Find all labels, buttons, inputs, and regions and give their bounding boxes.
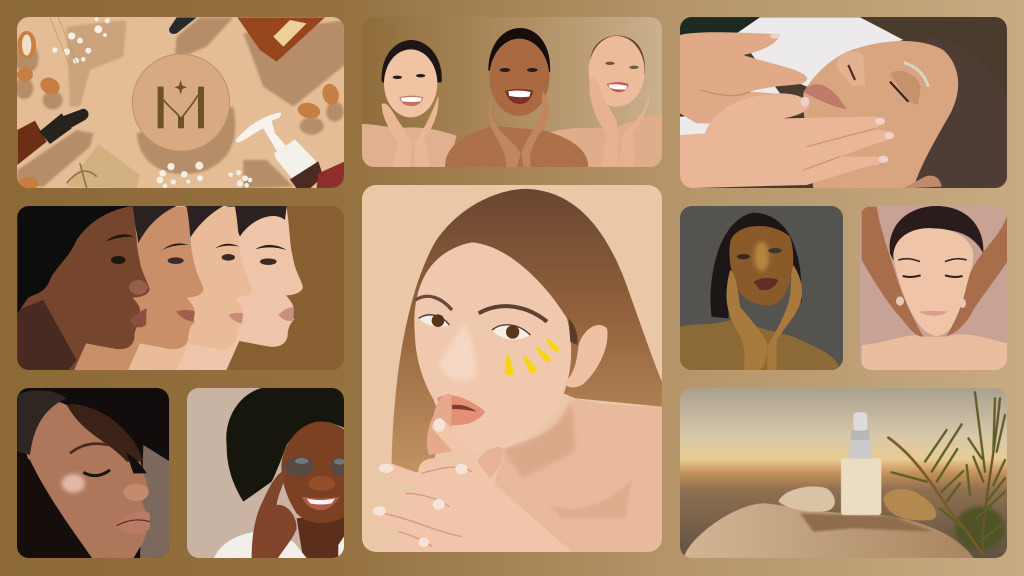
- woman center: [445, 28, 588, 167]
- product shadows: [15, 17, 347, 188]
- panel: woman with gold sheen on skin: [680, 206, 843, 370]
- therapist upper hand: [680, 32, 808, 123]
- hair: [391, 189, 662, 478]
- bottle: [841, 412, 881, 515]
- panel: facial massage: [680, 17, 1008, 188]
- argan nuts: [17, 31, 341, 190]
- panel: side-lit face closeup: [17, 388, 170, 560]
- amber jar: [237, 17, 325, 62]
- profile 4: lightest: [176, 206, 303, 370]
- afro: [226, 387, 345, 502]
- interlaced hands: [371, 394, 572, 555]
- white sheet: [680, 17, 903, 137]
- profile 3: [128, 206, 252, 370]
- shoulder and chest: [495, 398, 662, 555]
- neck shadow: [502, 398, 575, 478]
- dropper bottle: [17, 109, 89, 165]
- lips: [437, 395, 485, 425]
- white robe: [213, 532, 308, 560]
- woman left: [362, 40, 457, 167]
- eyes and brows: [415, 296, 547, 339]
- panel: woman with afro pointing to eye: [187, 387, 349, 560]
- profile 1: darkest: [17, 206, 150, 370]
- client face: [803, 41, 958, 188]
- pump bottle: [235, 112, 344, 188]
- wooden disc: [132, 54, 230, 151]
- profile 2: [74, 206, 204, 370]
- therapist lower hand: [680, 93, 893, 188]
- dried flowers: [52, 17, 252, 188]
- pointing hand: [252, 470, 297, 560]
- face: [281, 422, 345, 523]
- sand mound: [683, 503, 975, 560]
- dropper tip at top: [169, 17, 197, 34]
- panel: product flatlay with logo: [15, 17, 347, 190]
- panel: central portrait with yellow serum marks: [362, 185, 662, 555]
- woman right: [550, 36, 662, 167]
- panel: serum bottle at sunset: [680, 388, 1007, 560]
- serum marks: [505, 338, 559, 375]
- ear: [566, 325, 608, 387]
- panel: three smiling women: [362, 17, 662, 167]
- panel: four skin-tone profiles: [0, 204, 344, 373]
- panel: head massage: [860, 206, 1008, 372]
- hair strand near ear: [569, 318, 577, 345]
- face: [414, 242, 571, 453]
- neck: [297, 512, 345, 560]
- client hair: [913, 38, 1008, 188]
- soap bar: [67, 144, 140, 188]
- plant: [888, 392, 1005, 558]
- stones: [778, 486, 835, 512]
- logo monogram: [158, 80, 204, 128]
